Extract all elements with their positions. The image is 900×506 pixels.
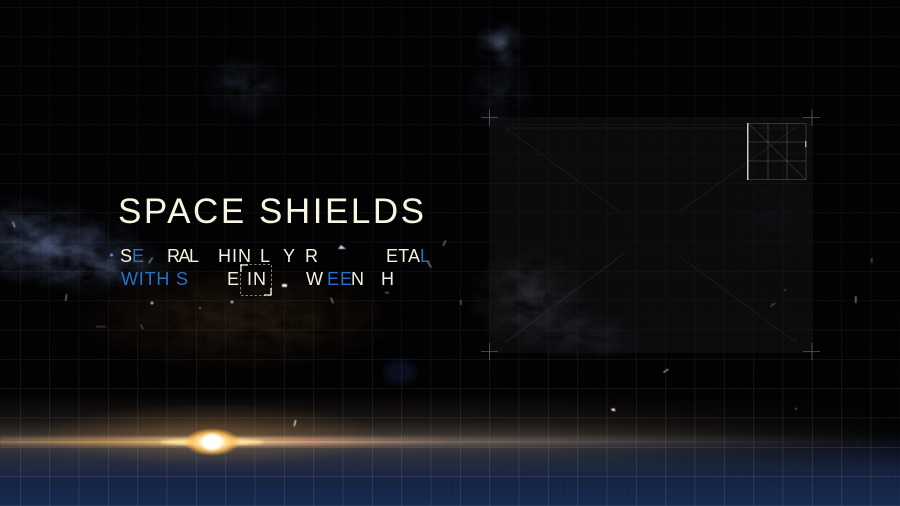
subtitle line 1: Y <box>283 246 295 266</box>
title: SPACE SHIELDS <box>118 192 424 231</box>
subtitle line 1: HIN <box>218 246 251 266</box>
subtitle line 2: EE <box>327 269 352 289</box>
subtitle line 2: WITH S <box>121 269 188 289</box>
subtitle line 2: N <box>351 269 364 289</box>
small grid icon <box>747 123 806 180</box>
nebula clouds <box>0 19 840 375</box>
sun flare <box>0 428 900 456</box>
subtitle line 2: E <box>227 269 239 289</box>
subtitle line 2 <box>121 269 394 289</box>
scattered debris <box>12 221 872 426</box>
subtitle line 1: RAL <box>167 246 199 266</box>
subtitle line 1: L <box>420 246 430 266</box>
subtitle line 1: L <box>260 246 270 266</box>
subtitle line 2: W <box>306 269 323 289</box>
subtitle line 1: ETA <box>386 246 420 266</box>
nebula soft base <box>0 35 507 384</box>
corner crosshairs <box>481 109 820 360</box>
subtitle line 1: R <box>305 246 318 266</box>
diagram frame panel <box>481 109 820 360</box>
highlight bracket <box>240 264 272 296</box>
subtitle line 1: E <box>132 246 144 266</box>
subtitle line 1: S <box>120 246 132 266</box>
planet horizon glow <box>0 392 900 506</box>
subtitle line 1 <box>110 246 430 266</box>
frame diagonals <box>506 128 795 342</box>
subtitle line 2: H <box>381 269 394 289</box>
subtitle line 2: IN <box>247 269 266 289</box>
